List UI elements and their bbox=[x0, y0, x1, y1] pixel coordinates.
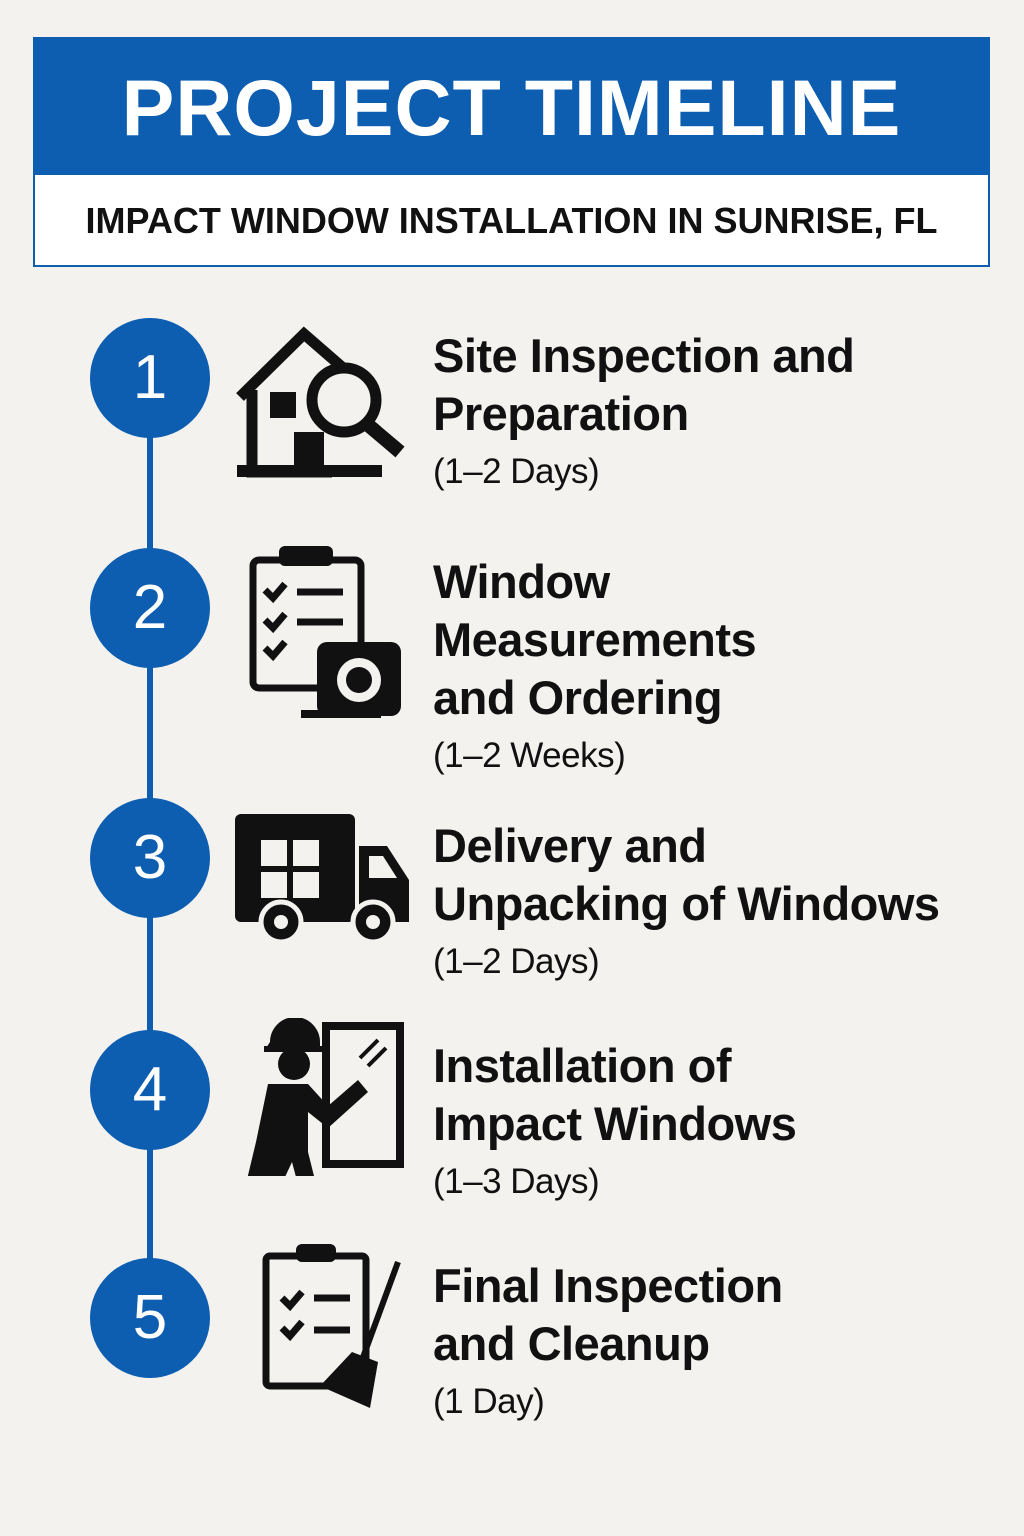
step 5 text: (1 Day) bbox=[433, 1382, 544, 1421]
subtitle bar bbox=[33, 175, 990, 267]
header: title bar: PROJECT TIMELINE bbox=[122, 63, 901, 152]
step 1 text: (1–2 Days) bbox=[433, 452, 599, 491]
step 4 text: Impact Windows bbox=[433, 1097, 796, 1150]
step 2 circle bbox=[90, 548, 210, 668]
step 5 text: and Cleanup bbox=[433, 1317, 710, 1370]
step 3 text: Delivery and bbox=[433, 819, 707, 872]
step 5 circle bbox=[90, 1258, 210, 1378]
step 4 text: Installation of bbox=[433, 1039, 731, 1092]
icon: checklist with broom bbox=[262, 1244, 401, 1408]
step 5 circle: 5 bbox=[133, 1283, 167, 1352]
step 5 text: Final Inspection bbox=[433, 1259, 783, 1312]
icon: clipboard with camera bbox=[250, 546, 401, 718]
step 4 text: (1–3 Days) bbox=[433, 1162, 599, 1201]
step 1 text: Site Inspection and bbox=[433, 329, 854, 382]
step 4 circle: 4 bbox=[133, 1055, 167, 1124]
step 5 text bbox=[433, 1259, 783, 1421]
step 1 circle bbox=[90, 318, 210, 438]
step 3 circle: 3 bbox=[133, 823, 167, 892]
step 3 circle bbox=[90, 798, 210, 918]
step 3 text: (1–2 Days) bbox=[433, 942, 599, 981]
timeline line bbox=[147, 378, 153, 1318]
step 3 text: Unpacking of Windows bbox=[433, 877, 940, 930]
header: title bar bbox=[33, 37, 990, 175]
step 1 text bbox=[433, 329, 854, 491]
step 2 text: (1–2 Weeks) bbox=[433, 736, 625, 775]
icon: worker installing window bbox=[248, 1018, 404, 1176]
step 3 text bbox=[433, 819, 940, 981]
icon: delivery truck bbox=[235, 814, 409, 940]
step 2 text bbox=[433, 555, 756, 775]
subtitle bar: IMPACT WINDOW INSTALLATION IN SUNRISE, FL bbox=[86, 200, 937, 241]
step 2 text: Measurements bbox=[433, 613, 756, 666]
step 2 circle: 2 bbox=[133, 573, 167, 642]
step 4 text bbox=[433, 1039, 796, 1201]
step 1 text: Preparation bbox=[433, 387, 689, 440]
icon: house with magnifier bbox=[236, 326, 404, 478]
step 2 text: Window bbox=[433, 555, 610, 608]
step 1 circle: 1 bbox=[133, 343, 167, 412]
step 2 text: and Ordering bbox=[433, 671, 722, 724]
step 4 circle bbox=[90, 1030, 210, 1150]
